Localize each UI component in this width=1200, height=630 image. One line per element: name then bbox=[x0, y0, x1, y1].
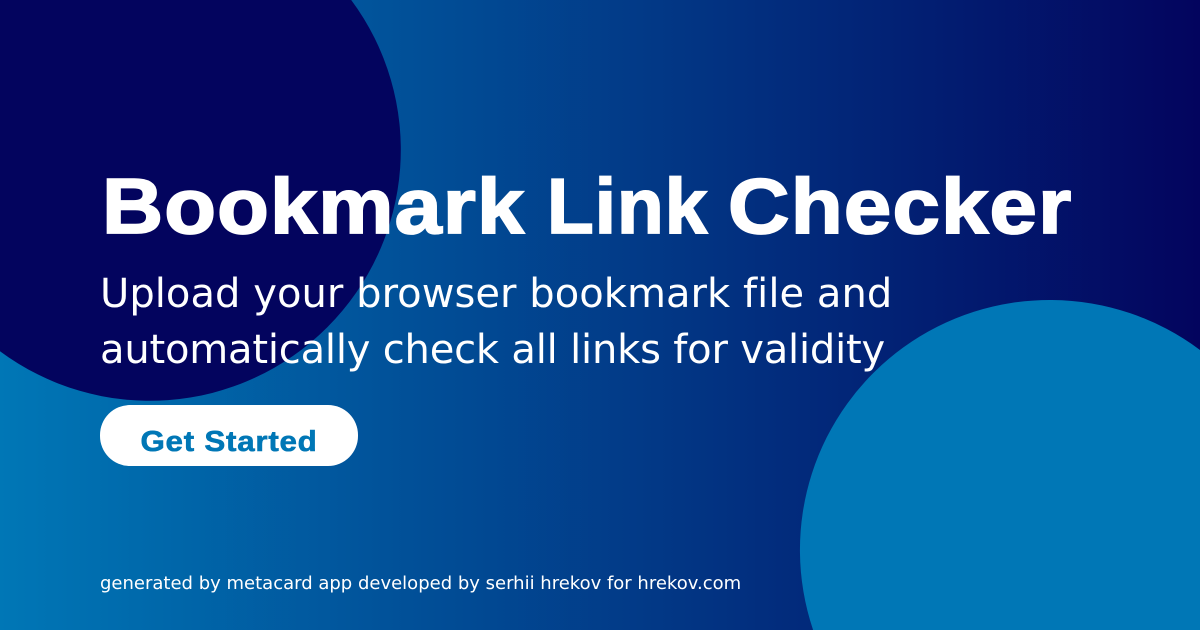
button: Get Started bbox=[100, 405, 358, 466]
title: Link bbox=[547, 162, 708, 250]
subtitle: Upload your browser bookmark file and bbox=[100, 271, 892, 317]
subtitle: automatically check all links for validity bbox=[100, 327, 885, 373]
title: Bookmark bbox=[102, 162, 525, 250]
footer credit: generated by metacard app developed by serhii hrekov for hrekov.com bbox=[100, 573, 741, 594]
button: Get Started: Get Started bbox=[140, 426, 318, 458]
title: Checker bbox=[728, 162, 1072, 250]
subtitle bbox=[100, 271, 892, 373]
title bbox=[102, 162, 1072, 250]
